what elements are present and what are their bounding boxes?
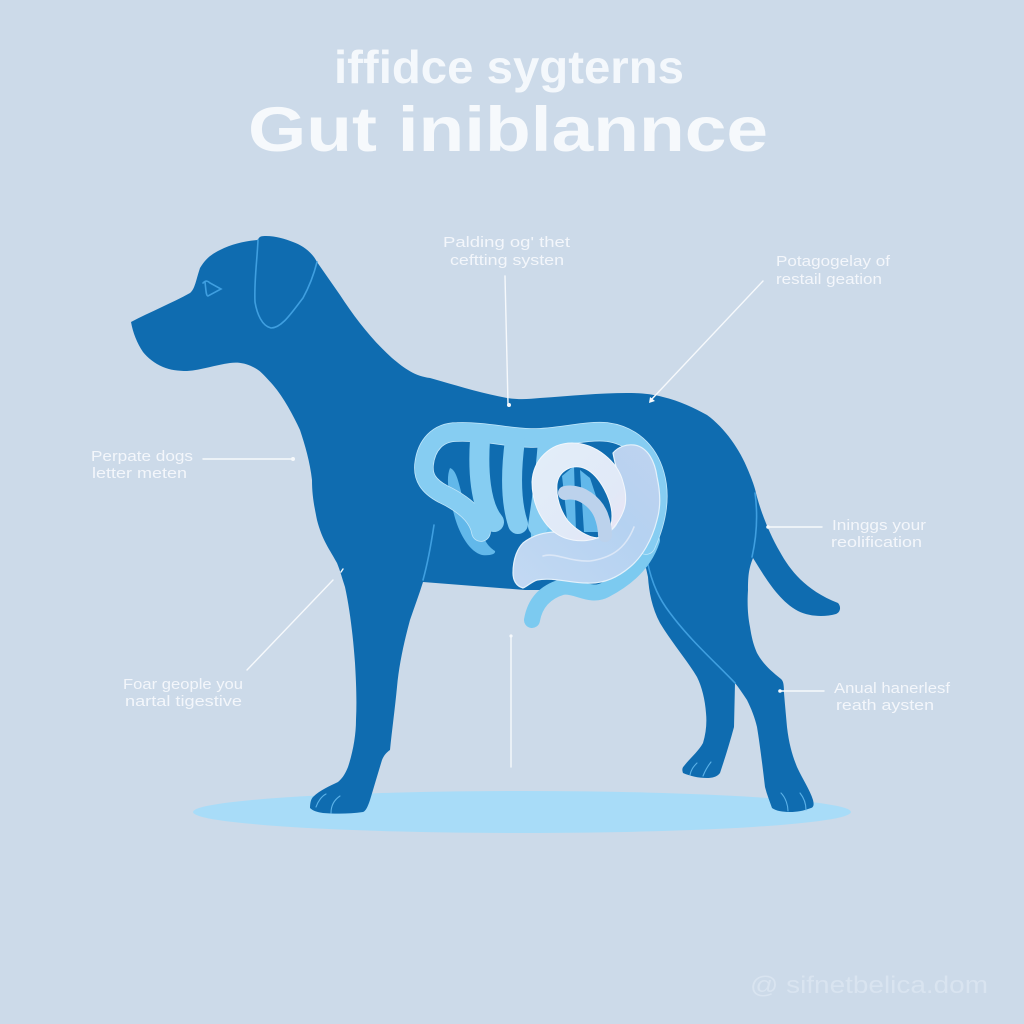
pointer line — [510, 637, 512, 767]
fold two — [512, 440, 518, 524]
tail dot — [766, 525, 770, 529]
main tube — [424, 432, 658, 545]
center vertical pointer — [509, 634, 513, 767]
ground shadow — [193, 791, 851, 833]
white ring loop — [532, 443, 626, 541]
left chest text: letter meten — [92, 466, 187, 482]
top center text: Palding og' thet — [443, 235, 570, 251]
dog silhouette — [131, 236, 840, 814]
callout: top center — [443, 235, 570, 407]
front leg text: nartal tigestive — [125, 694, 242, 710]
mid fill behind fingers — [530, 495, 565, 537]
fold three — [538, 440, 548, 526]
subtitle line: iffidce sygterns — [334, 41, 684, 93]
lower tube tail — [532, 540, 652, 620]
hind leg leader — [780, 690, 824, 692]
left chest leader — [203, 458, 293, 460]
rump contour line — [752, 493, 757, 557]
ring hole light stripes — [562, 466, 604, 532]
tail leader — [768, 526, 822, 528]
hind leg text: reath aysten — [836, 698, 934, 714]
main heading: Gut iniblannce — [248, 95, 768, 165]
ear outline — [255, 240, 317, 328]
top center leader — [505, 276, 508, 404]
front leg leader — [247, 580, 333, 670]
inner darker loop — [448, 468, 495, 555]
front leg text: Foar geople you — [123, 677, 243, 693]
callout: front leg — [123, 569, 343, 710]
fold one — [479, 440, 494, 522]
left chest text: Perpate dogs — [91, 449, 193, 465]
top right leader — [651, 281, 763, 400]
callout: left chest — [91, 449, 295, 482]
callout: tail — [766, 518, 926, 551]
paw toes — [316, 762, 806, 813]
ring hole background — [557, 465, 605, 532]
chest contour line — [423, 525, 434, 580]
left chest dot — [291, 457, 295, 461]
gut illustration — [424, 432, 660, 620]
top right text — [776, 254, 891, 288]
top center dot — [507, 403, 511, 407]
title — [248, 41, 768, 165]
callout: hind leg — [778, 681, 951, 714]
left chest text — [91, 449, 193, 482]
intestine folds — [479, 440, 548, 526]
top right arrowhead — [649, 397, 655, 403]
hind thigh contour line — [647, 560, 735, 683]
main tube outline — [424, 432, 658, 545]
pointer tip — [509, 634, 513, 638]
tail text — [831, 518, 926, 551]
top center text — [443, 235, 570, 269]
lavender highlight curve — [543, 527, 634, 561]
front leg text — [123, 677, 243, 710]
top right text: restail geation — [776, 272, 882, 288]
hind leg text — [834, 681, 951, 714]
top center text: ceftting systen — [450, 253, 564, 269]
tail text: reolification — [831, 535, 922, 551]
front leg marker — [341, 569, 343, 572]
callout: top right — [649, 254, 891, 403]
hind leg text: Anual hanerlesf — [834, 681, 951, 697]
dog body — [131, 236, 840, 814]
watermark: @ sifnetbelica.dom — [750, 972, 988, 999]
top right text: Potagogelay of — [776, 254, 891, 270]
lavender large colon — [513, 445, 660, 588]
eye — [203, 281, 221, 296]
inner lavender tube — [565, 493, 605, 535]
hind leg dot — [778, 689, 782, 693]
tail text: Ininggs your — [832, 518, 926, 534]
